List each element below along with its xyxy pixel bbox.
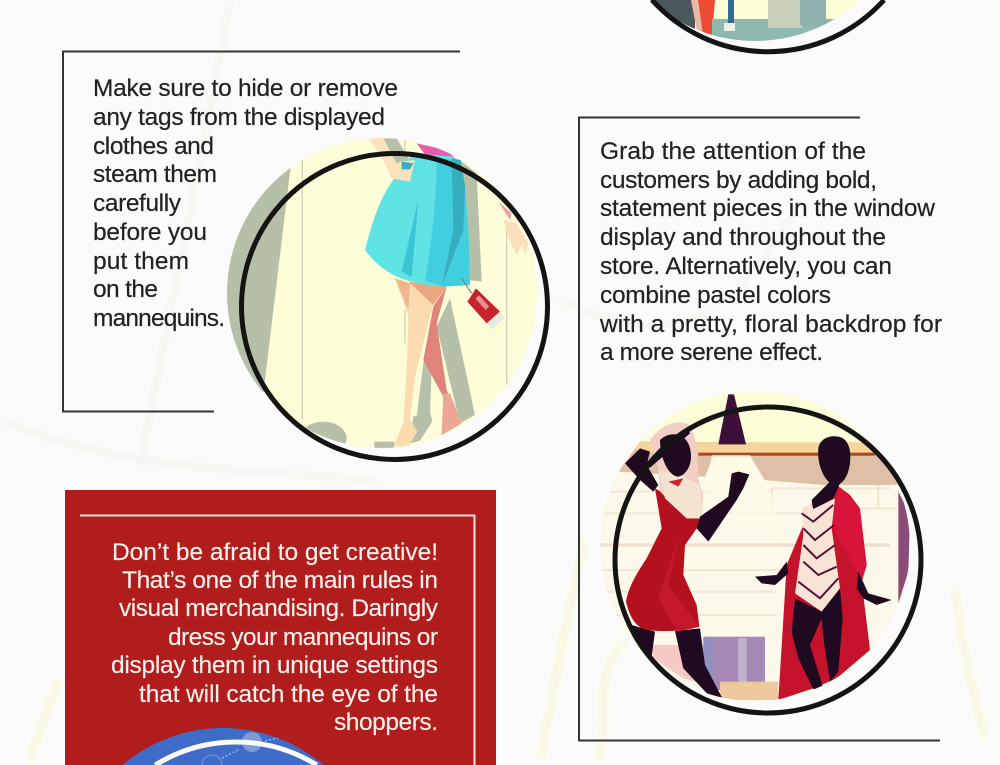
text block: visual merchandising. Daringly bbox=[119, 595, 439, 622]
panel frame bbox=[579, 118, 940, 740]
panel: hide tags bbox=[63, 52, 548, 460]
text block: with a pretty, floral backdrop for bbox=[599, 311, 942, 338]
text block: combine pastel colors bbox=[600, 282, 831, 309]
text block: a more serene effect. bbox=[600, 339, 823, 366]
text block: steam them bbox=[93, 161, 217, 188]
text block bbox=[111, 539, 439, 736]
illustration: blue circle cropped by page edge bbox=[122, 728, 324, 765]
ring bbox=[615, 407, 921, 713]
text block: any tags from the displayed bbox=[93, 104, 385, 131]
text block bbox=[599, 138, 942, 366]
text block: display them in unique settings bbox=[111, 652, 438, 679]
text block: store. Alternatively, you can bbox=[600, 253, 892, 280]
text block: clothes and bbox=[93, 133, 214, 160]
text block: Grab the attention of the bbox=[600, 138, 866, 165]
text block: statement pieces in the window bbox=[600, 195, 935, 222]
text block: Don’t be afraid to get creative! bbox=[112, 539, 438, 566]
panel: get creative bbox=[65, 490, 496, 765]
text block bbox=[93, 75, 398, 332]
text block: shoppers. bbox=[334, 709, 438, 736]
text block: on the bbox=[93, 276, 158, 303]
text block: mannequins. bbox=[93, 305, 225, 332]
illustration: top circle cropped by page edge bbox=[640, 0, 884, 55]
text block: before you bbox=[93, 219, 207, 246]
text block: put them bbox=[93, 248, 189, 275]
illustration: mannequin with tag bbox=[220, 130, 537, 455]
illustration: two mannequins bbox=[597, 391, 913, 705]
text block: That’s one of the main rules in bbox=[122, 567, 438, 594]
text block: Make sure to hide or remove bbox=[93, 75, 398, 102]
panel frame bbox=[63, 52, 460, 412]
panel: statement pieces bbox=[579, 118, 942, 740]
text block: dress your mannequins or bbox=[168, 624, 438, 651]
panel frame bbox=[80, 516, 474, 765]
text block: carefully bbox=[93, 190, 182, 217]
text block: display and throughout the bbox=[600, 224, 886, 251]
ring bbox=[242, 154, 548, 460]
text block: customers by adding bold, bbox=[600, 167, 877, 194]
text block: that will catch the eye of the bbox=[139, 681, 438, 708]
